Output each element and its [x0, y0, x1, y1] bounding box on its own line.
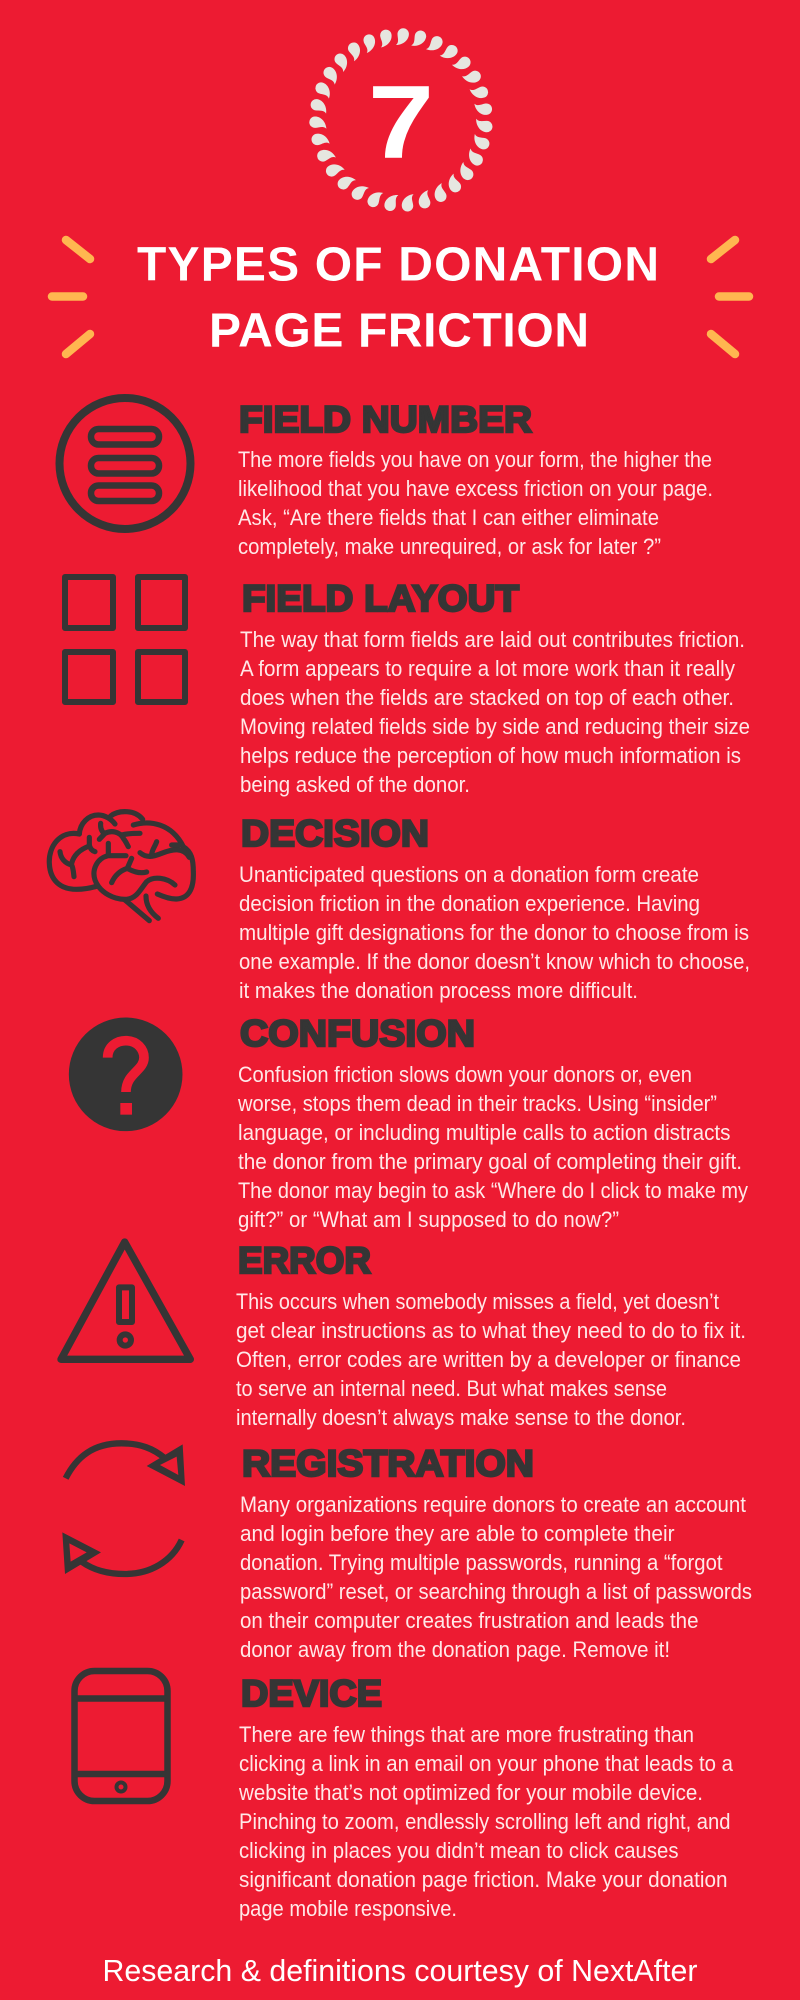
panel: registration [62, 1443, 752, 1662]
text block [238, 1722, 734, 1921]
icon: circular arrows [62, 1443, 185, 1574]
text block: Ask, “Are there fields that I can either eliminate [238, 505, 659, 530]
text block: helps reduce the perception of how much information is [240, 743, 741, 768]
text block: worse, stops them dead in their tracks. Using “insider” [237, 1091, 717, 1116]
icon: four field grid [65, 577, 185, 702]
text block: password” reset, or searching through a list of passwords [240, 1579, 752, 1604]
icon: brain [49, 812, 193, 921]
icon: ring of drops [309, 28, 493, 212]
icon: list in circle [60, 398, 190, 529]
heading: DEVICE [241, 1673, 382, 1714]
text block: website that’s not optimized for your mobile device. [238, 1780, 703, 1805]
text block: being asked of the donor. [240, 772, 470, 797]
text block [236, 1289, 746, 1430]
heading: DECISION [241, 813, 429, 854]
text block: donation. Trying multiple passwords, running a “forgot [240, 1550, 722, 1575]
text block [237, 1062, 748, 1232]
text block: donor away from the donation page. Remove it! [240, 1637, 670, 1662]
title: PAGE FRICTION [209, 304, 589, 358]
text block: significant donation page friction. Make your donation [239, 1867, 728, 1892]
icon: question mark circle [69, 1017, 182, 1131]
text block: This occurs when somebody misses a field, yet doesn’t [236, 1289, 719, 1314]
text block: Unanticipated questions on a donation form create [239, 862, 699, 887]
text block: get clear instructions as to what they need to do to fix it. [236, 1318, 746, 1343]
text block: gift?” or “What am I supposed to do now?” [238, 1207, 619, 1232]
text block: The more fields you have on your form, the higher the [238, 447, 712, 472]
text block [240, 627, 750, 797]
heading: FIELD NUMBER [239, 399, 532, 440]
text block: on their computer creates frustration and leads the [240, 1608, 698, 1633]
text block: clicking a link in an email on your phone that leads to a [239, 1751, 734, 1776]
text block [239, 862, 750, 1003]
text block: Many organizations require donors to create an account [240, 1492, 746, 1517]
text block: decision friction in the donation experience. Having [239, 891, 700, 916]
number 7: 7 [368, 65, 434, 181]
text block: the donor from the primary goal of completing their gift. [238, 1149, 742, 1174]
heading: REGISTRATION [242, 1443, 534, 1484]
text block: Pinching to zoom, endlessly scrolling left and right, and [239, 1809, 730, 1834]
panel: decision [49, 812, 750, 1003]
text block: language, or including multiple calls to action distracts [238, 1120, 730, 1145]
text block: clicking in places you didn’t mean to click causes [239, 1838, 678, 1863]
icon: left sunburst [52, 240, 90, 354]
text block [238, 447, 713, 559]
text block: multiple gift designations for the donor to choose from is [239, 920, 749, 945]
heading: ERROR [238, 1240, 371, 1281]
text block [240, 1492, 752, 1662]
text block: does when the fields are stacked on top of each other. [240, 685, 734, 710]
text block: one example. If the donor doesn’t know which to choose, [239, 949, 750, 974]
panel: confusion [69, 1013, 748, 1232]
heading: FIELD LAYOUT [242, 578, 519, 619]
text block: The donor may begin to ask “Where do I click to make my [238, 1178, 748, 1203]
text block: Confusion friction slows down your donors or, even [238, 1062, 692, 1087]
text block: likelihood that you have excess friction on your page. [238, 476, 713, 501]
text block: it makes the donation process more difficult. [239, 978, 638, 1003]
text block: to serve an internal need. But what makes sense [236, 1376, 667, 1401]
badge: number seven in drop ring [309, 28, 493, 212]
text block: page mobile responsive. [239, 1896, 457, 1921]
footer credit: Research & definitions courtesy of NextAfter [102, 1953, 698, 1988]
text block: completely, make unrequired, or ask for later ?” [238, 534, 661, 559]
panel: device [74, 1671, 734, 1921]
text block: Often, error codes are written by a developer or finance [236, 1347, 741, 1372]
text block: internally doesn’t always make sense to the donor. [236, 1405, 686, 1430]
panel: field layout [65, 577, 750, 797]
panel: error [61, 1240, 746, 1430]
icon: warning triangle [61, 1242, 190, 1359]
panel: field number [60, 398, 713, 559]
text block: Moving related fields side by side and reducing their size [240, 714, 750, 739]
title: TYPES OF DONATION [137, 238, 659, 292]
text block: and login before they are able to complete their [240, 1521, 674, 1546]
text block: The way that form fields are laid out contributes friction. [240, 627, 745, 652]
icon: phone [74, 1671, 168, 1801]
heading: CONFUSION [240, 1013, 475, 1054]
title [137, 238, 659, 358]
icon: right sunburst [711, 240, 749, 354]
text block: A form appears to require a lot more work than it really [240, 656, 735, 681]
text block: There are few things that are more frustrating than [239, 1722, 694, 1747]
